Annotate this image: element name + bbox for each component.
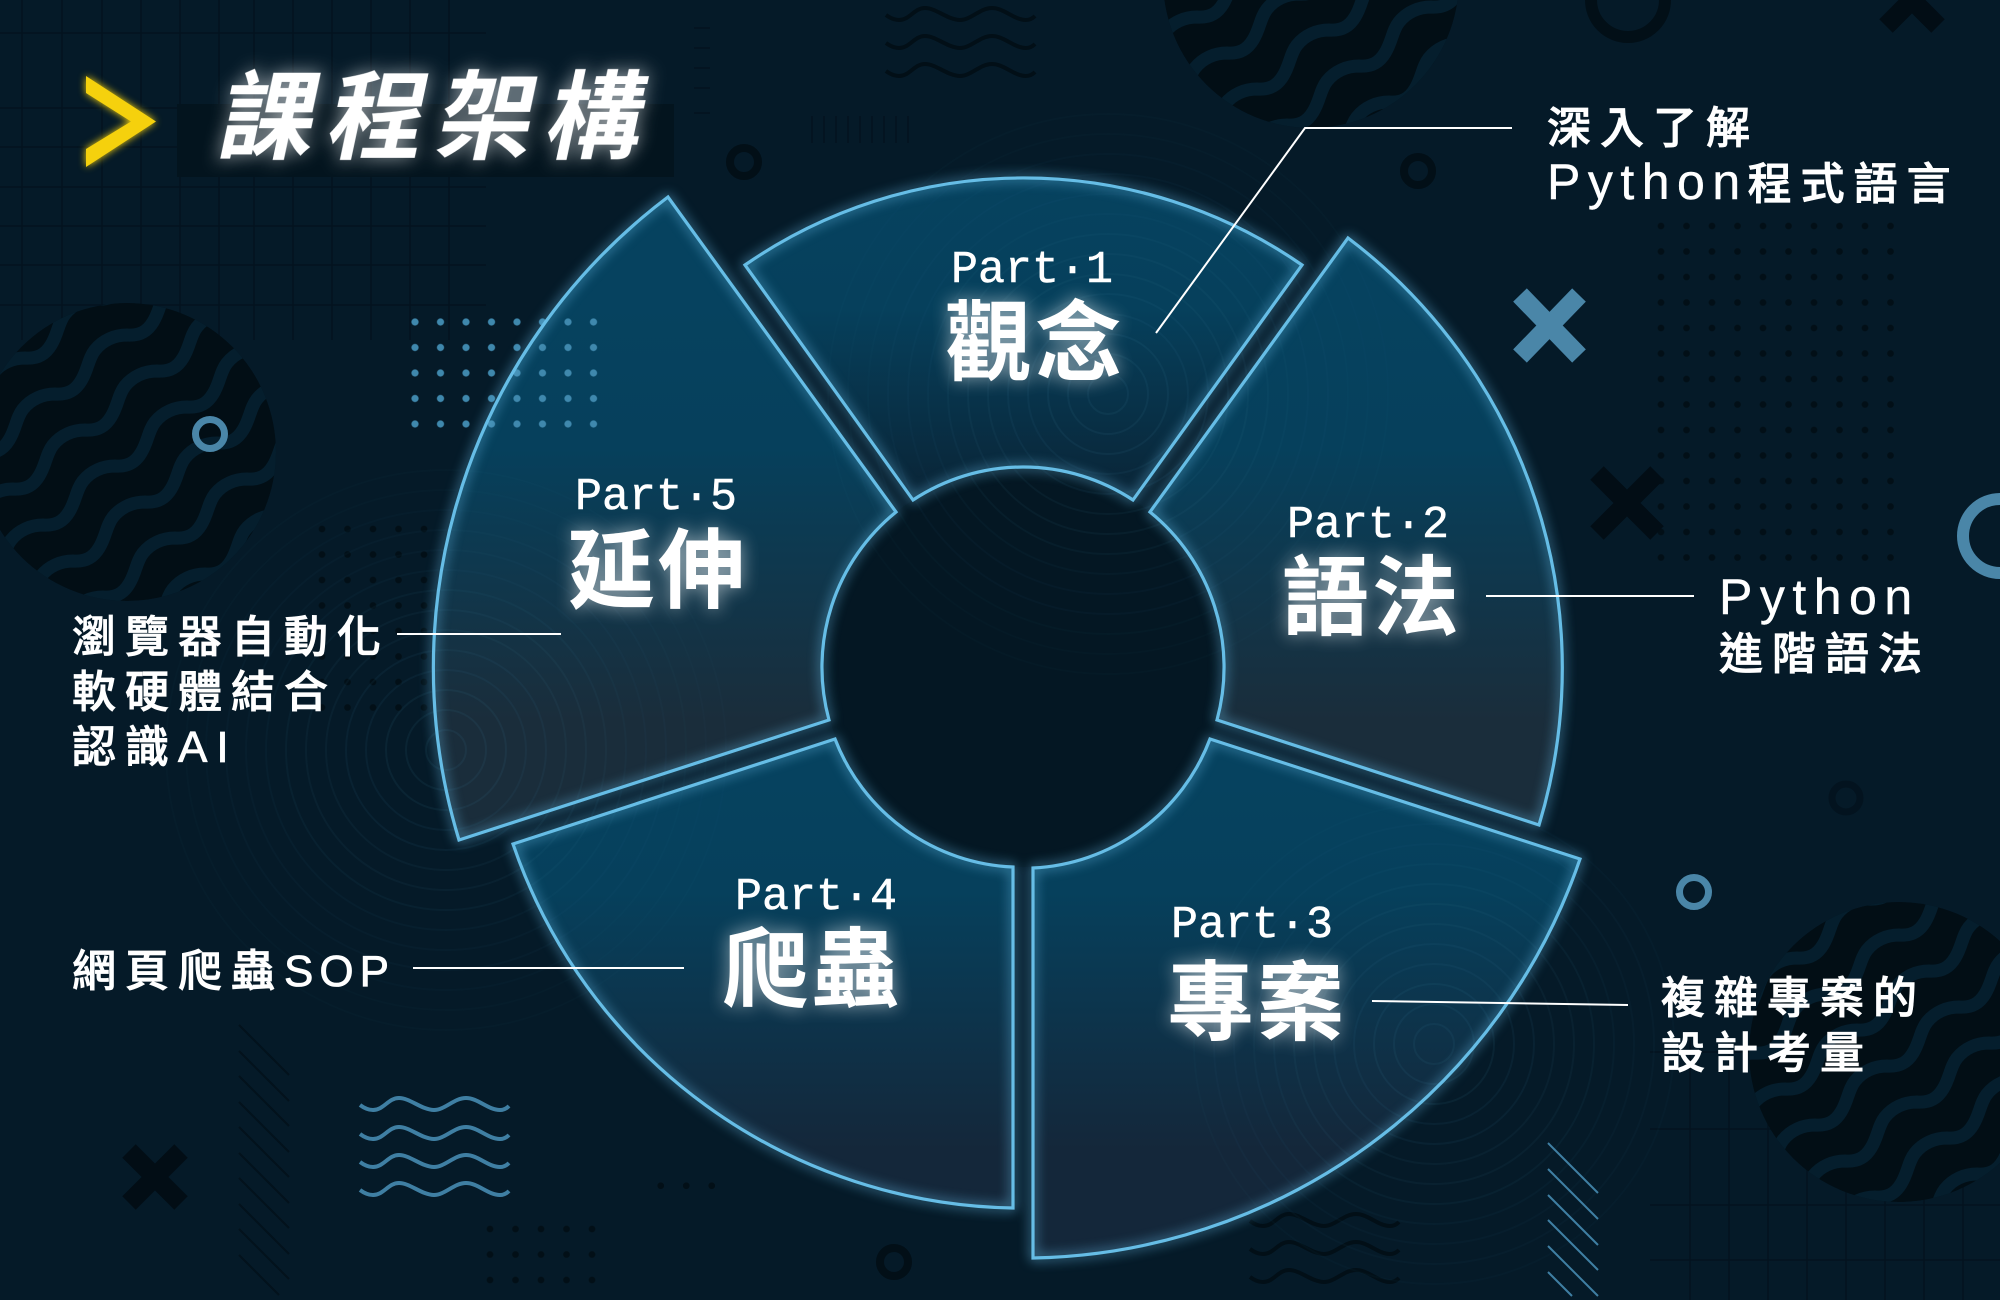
dark wave lines: bottom (1250, 1214, 1399, 1282)
part 3 label: Part (1171, 900, 1279, 951)
blue x mark (1520, 295, 1579, 356)
dark wave lines: top (886, 8, 1035, 76)
blue diagonal lines (1548, 1143, 1598, 1296)
callout line: part 4 (413, 967, 684, 969)
dark dot grid: bottom (477, 1216, 605, 1293)
blue ring: lower right (1680, 878, 1708, 906)
part 2 label: 2 (1422, 500, 1449, 551)
inner circle (823, 467, 1223, 867)
callout text: part 3: 設計考量 (1661, 1029, 1873, 1078)
part 1 label: . (1059, 236, 1086, 287)
title band (177, 104, 674, 177)
callout text: part 3 (1661, 974, 1926, 1078)
callout line: part 2 (1486, 595, 1694, 597)
part 4 heading: 爬蟲 (722, 922, 902, 1019)
part 4 label: Part (735, 872, 843, 923)
segment 2 fill (1150, 238, 1562, 825)
part 4 label: . (843, 863, 870, 914)
part 2 heading: 語法 (1282, 550, 1462, 647)
callout text: part 5: 瀏覽器自動化 (72, 613, 390, 662)
callout text: part 2: Python (1719, 569, 1920, 625)
blue wave lines (360, 1098, 509, 1195)
part 5 label: Part (575, 472, 683, 523)
callout line: part 1 (1156, 128, 1512, 333)
callout line: part 3 (1372, 1001, 1628, 1005)
dark diagonal lines (239, 1025, 289, 1295)
part 3 label: 3 (1306, 900, 1333, 951)
title: 課程架構 (211, 64, 669, 172)
blue dot grid (402, 309, 606, 437)
callout text: part 1 (1547, 104, 1960, 210)
callout text: part 5 (72, 613, 390, 772)
callout text: part 1: 深入了解 (1547, 104, 1759, 153)
blue ring: left (196, 420, 224, 448)
callout line: part 5 (397, 633, 561, 635)
callout text: part 3: 複雜專案的 (1661, 974, 1926, 1023)
part 1 heading: 觀念 (945, 295, 1125, 392)
dark dot grid: right (1648, 213, 1903, 570)
part 5 heading: 延伸 (568, 523, 748, 620)
part 2 label: Part (1287, 500, 1395, 551)
segment 1 fill (745, 178, 1302, 500)
blue ring: right edge (1963, 499, 2000, 573)
wavy circle: left (0, 303, 276, 601)
dark dot grid: left (309, 516, 437, 720)
part 5 label: . (683, 463, 710, 514)
wavy circle: top (1164, 0, 1457, 127)
segment 4 fill (513, 739, 1013, 1208)
callout text: part 2 (1719, 569, 1931, 679)
segment fills (433, 178, 1580, 1258)
icon: yellow chevron (86, 76, 156, 167)
segment 5 fill (433, 197, 896, 840)
callout text: part 1: Python程式語言 (1547, 154, 1960, 210)
part 3 label: . (1279, 891, 1306, 942)
callout text: part 5: 軟硬體結合 (72, 668, 337, 717)
part 5 label: 5 (710, 472, 737, 523)
part 3 heading: 專案 (1167, 955, 1347, 1052)
part 1 label: 1 (1086, 245, 1113, 296)
segment outlines (433, 178, 1580, 1258)
callout text: part 4: 網頁爬蟲SOP (72, 947, 395, 996)
wavy circle: bottom right (1749, 902, 2000, 1202)
part 1 label: Part (951, 245, 1059, 296)
ripple rings (166, 114, 1674, 1284)
dark dots: three (648, 1173, 724, 1198)
dark rings (730, 0, 1860, 1276)
callout text: part 5: 認識AI (72, 723, 238, 772)
segment 3 fill (1033, 739, 1580, 1258)
callout text: part 2: 進階語法 (1719, 630, 1931, 679)
part 4 label: 4 (870, 872, 897, 923)
part 2 label: . (1395, 491, 1422, 542)
